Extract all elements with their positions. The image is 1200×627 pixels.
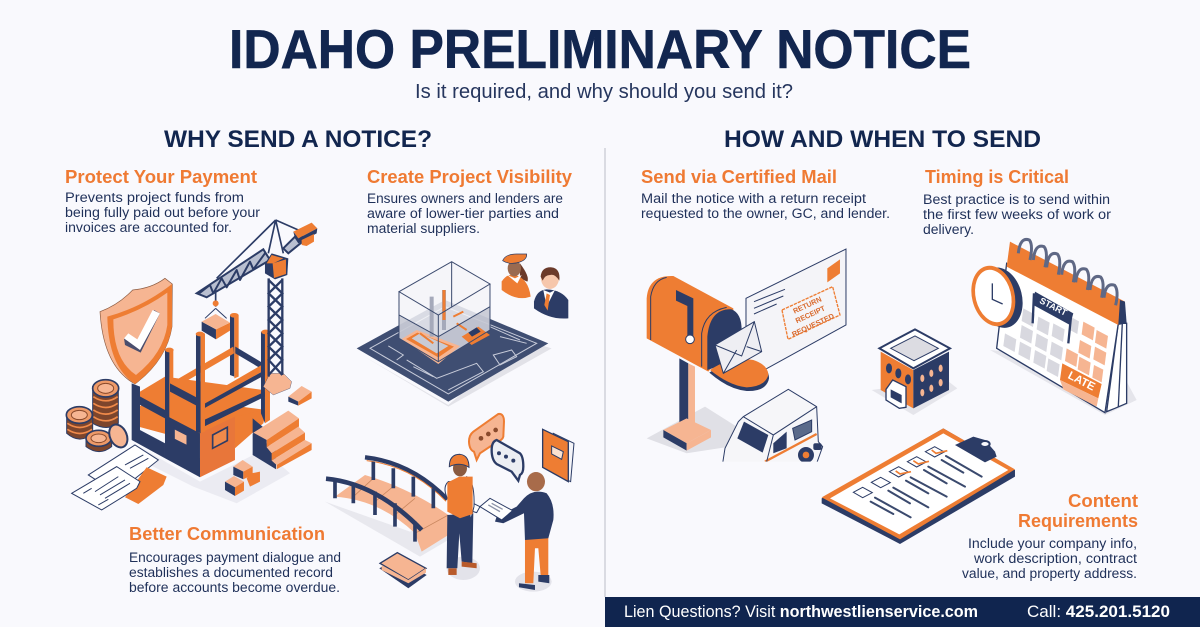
books	[379, 553, 427, 588]
text block: better communication: before accounts become overdue.	[129, 580, 340, 595]
client	[495, 472, 554, 592]
glass box	[399, 262, 490, 364]
illustration: shield, building under construction, crane, coins and invoices	[66, 220, 317, 510]
text block: content requirements: Include your company info,	[968, 536, 1137, 551]
text block: protect your payment: being fully paid out before your	[65, 205, 261, 220]
checklist	[853, 447, 982, 517]
large envelope with stamp	[746, 249, 846, 380]
document	[480, 498, 513, 520]
icon: invoices	[72, 445, 167, 510]
hanging block	[202, 314, 230, 339]
post	[663, 358, 711, 451]
text block: create project visibility: material suppliers.	[367, 221, 480, 236]
text block: send via certified mail: requested to the owner, GC, and lender.	[641, 206, 890, 221]
lower floor plate	[138, 397, 267, 443]
start label: START	[1038, 296, 1069, 318]
text block: protect your payment: Prevents project funds from	[65, 190, 244, 205]
text block: timing is critical	[923, 167, 1112, 237]
late label: LATE	[1066, 370, 1097, 394]
text block: create project visibility	[367, 167, 572, 236]
rings	[1018, 239, 1117, 305]
mail van	[723, 389, 823, 463]
illustration: blueprint with glass building and stakeholders	[357, 254, 568, 407]
text block: content requirements: value, and property address.	[962, 566, 1137, 581]
text block: send via certified mail	[641, 167, 890, 221]
text block: create project visibility: aware of lower-tier parties and	[367, 206, 559, 221]
illustration: calendar, clock and building	[872, 239, 1137, 415]
icon: orange speech bubble	[469, 414, 504, 460]
icon: stacked steps	[253, 411, 312, 469]
small block	[288, 386, 312, 406]
text block: create project visibility: Ensures owners and lenders are	[367, 191, 563, 206]
late label	[1060, 363, 1102, 407]
building	[872, 329, 957, 415]
small cubes	[225, 460, 260, 496]
footer bar: Call: 425.201.5120	[1027, 603, 1170, 621]
text block: content requirements: work description, contract	[973, 551, 1137, 566]
icon: coin stacks	[66, 380, 131, 452]
text block: content requirements	[962, 491, 1138, 581]
text block: timing is critical: delivery.	[923, 222, 974, 237]
text block: protect your payment	[65, 167, 261, 235]
mailbox	[647, 276, 769, 391]
text block: content requirements: Requirements	[1018, 511, 1138, 531]
bridge	[325, 457, 448, 557]
subtitle: Is it required, and why should you send it?	[415, 81, 793, 103]
small envelope	[715, 322, 762, 373]
back columns	[165, 348, 169, 387]
text block: protect your payment: Protect Your Payment	[65, 167, 257, 187]
text block: timing is critical: Timing is Critical	[925, 167, 1069, 187]
icon: shield with check	[100, 278, 172, 384]
text block: send via certified mail: Mail the notice with a return receipt	[641, 191, 866, 206]
text block: protect your payment: invoices are accounted for.	[65, 220, 232, 235]
text block: better communication: Better Communication	[129, 524, 325, 544]
person: woman in hard hat	[502, 254, 531, 298]
illustration: clipboard checklist	[822, 428, 1015, 544]
large envelope with stamp: RECEIPT	[794, 303, 827, 325]
footer bar	[605, 597, 1200, 627]
text block: better communication: establishes a documented record	[129, 565, 333, 580]
heading: how and when to send: HOW AND WHEN TO SEND	[724, 126, 1041, 153]
clock	[965, 261, 1029, 333]
person: man in suit	[534, 267, 568, 319]
illustration: mailbox, envelope and mail van	[647, 249, 846, 463]
icon: crane	[197, 220, 317, 395]
title: IDAHO PRELIMINARY NOTICE	[229, 18, 971, 80]
icon: navy speech bubble	[492, 440, 523, 481]
text block: content requirements: Content	[1068, 491, 1138, 511]
calendar	[990, 239, 1137, 415]
middle floor plate	[140, 377, 263, 430]
large envelope with stamp: RETURN	[792, 295, 823, 316]
text block: timing is critical: the first few weeks of work or	[923, 207, 1112, 222]
heading: why send a notice: WHY SEND A NOTICE?	[164, 126, 432, 153]
icon: notebook	[543, 429, 574, 482]
blueprint	[357, 300, 548, 402]
illustration: bridge, worker and client handshake	[325, 414, 574, 592]
front columns	[165, 350, 169, 423]
text block: timing is critical: Best practice is to send within	[923, 192, 1110, 207]
text block: better communication: Encourages payment dialogue and	[129, 550, 341, 565]
large envelope with stamp: REQUESTED	[790, 311, 835, 339]
worker	[445, 454, 480, 580]
text block: create project visibility: Create Project Visibility	[367, 167, 572, 187]
footer bar: Lien Questions? Visit northwestlienservice.com	[624, 603, 978, 621]
front walls	[165, 415, 200, 477]
back beams	[173, 347, 234, 388]
text block: send via certified mail: Send via Certified Mail	[641, 167, 837, 187]
text block: better communication	[129, 524, 341, 595]
start label	[1033, 292, 1073, 343]
